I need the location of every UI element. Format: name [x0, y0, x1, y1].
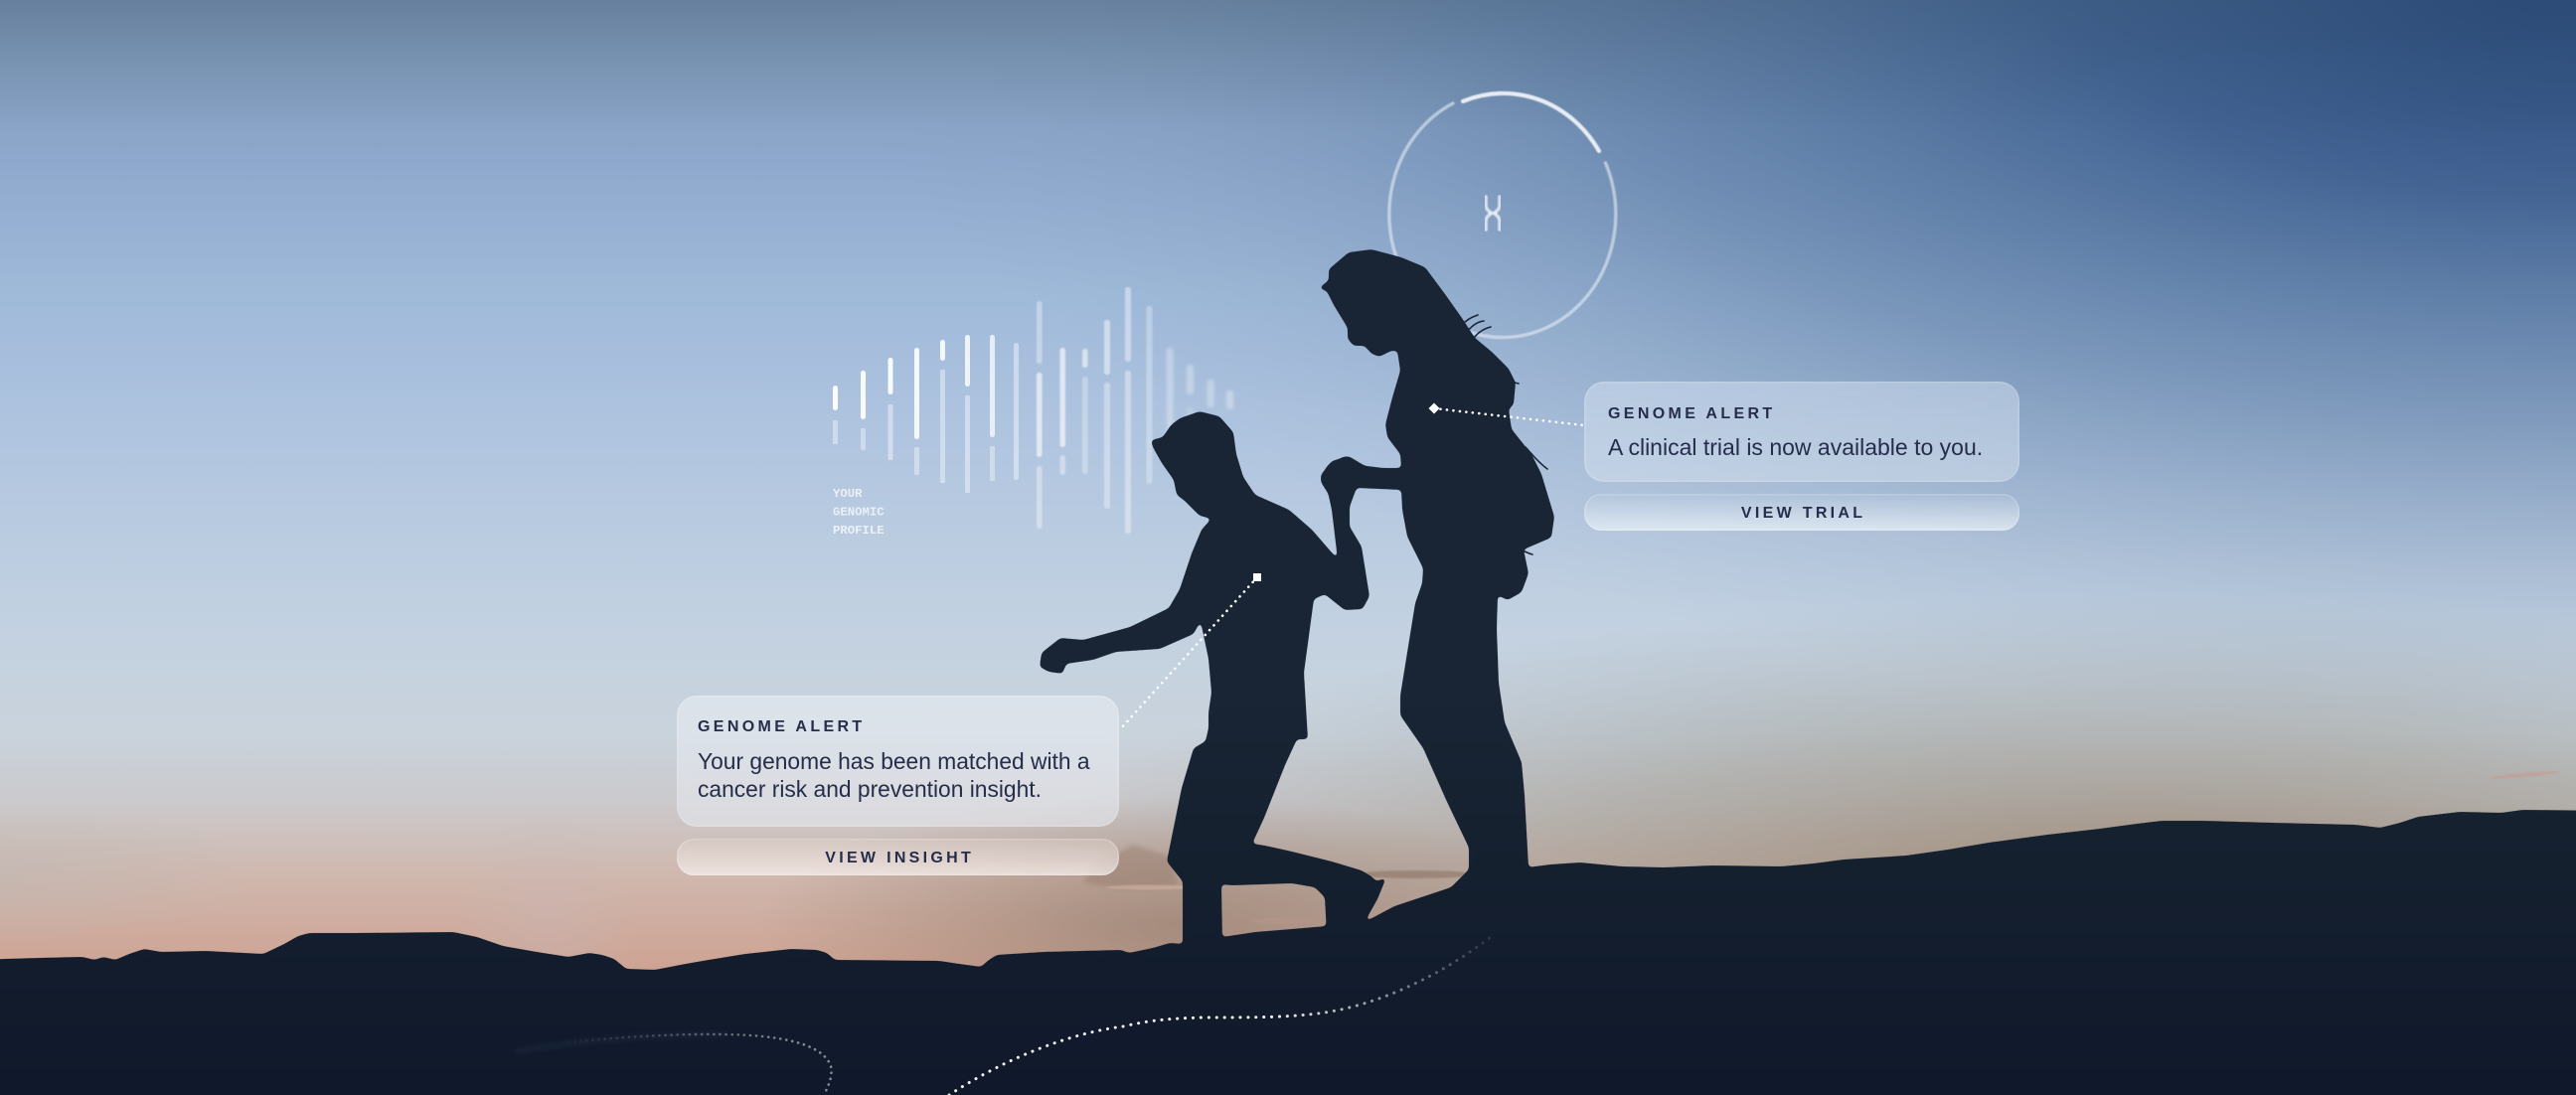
ground silhouette	[0, 810, 2576, 1095]
ring: thin arc	[1389, 103, 1616, 338]
horizon clouds	[1083, 770, 2560, 924]
label: your genomic profile: GENOMIC	[833, 505, 885, 519]
faint trail: dots	[557, 1034, 832, 1095]
icon: chromosome	[1486, 197, 1500, 230]
connector: clinical trial to body	[1429, 403, 1584, 425]
dotted path: main trail	[949, 937, 1491, 1095]
panel: clinical trial card	[1584, 382, 2019, 482]
silhouette: woman	[1319, 249, 1554, 874]
label: view trial: VIEW TRIAL	[1741, 505, 1865, 521]
marker: square	[1253, 573, 1261, 581]
callout: view trial alert	[1584, 382, 2019, 531]
text: cancer risk message: cancer risk and prevention insight.	[698, 775, 1042, 801]
text: cancer risk message: Your genome has been matched with a	[698, 747, 1090, 773]
connector: genome insight to body	[1121, 573, 1261, 728]
label: view insight: VIEW INSIGHT	[825, 849, 974, 866]
ring with chromosome icon	[1389, 93, 1616, 338]
dotted path: faint trail	[517, 1034, 832, 1095]
label: your genomic profile: PROFILE	[833, 524, 885, 538]
button: view insight	[677, 839, 1119, 875]
button: view trial	[1584, 494, 2019, 531]
heading: genome alert: GENOME ALERT	[1608, 405, 1775, 421]
faint trail: glow	[517, 1034, 725, 1051]
text: cancer risk message	[698, 747, 1090, 802]
silhouettes: ground and figures	[0, 249, 2576, 1095]
callout: view insight alert	[677, 696, 1119, 875]
waveform: your genomic profile	[833, 287, 1233, 534]
marker: diamond	[1429, 403, 1439, 413]
silhouette: man	[1040, 411, 1391, 949]
label: your genomic profile: YOUR	[833, 487, 863, 501]
ring: bright arc	[1463, 93, 1599, 151]
heading: genome alert: GENOME ALERT	[698, 717, 865, 735]
panel: cancer risk card	[677, 696, 1119, 827]
hair wisps	[1461, 315, 1547, 554]
text: clinical trial message: A clinical trial is now available to you.	[1608, 434, 1983, 460]
